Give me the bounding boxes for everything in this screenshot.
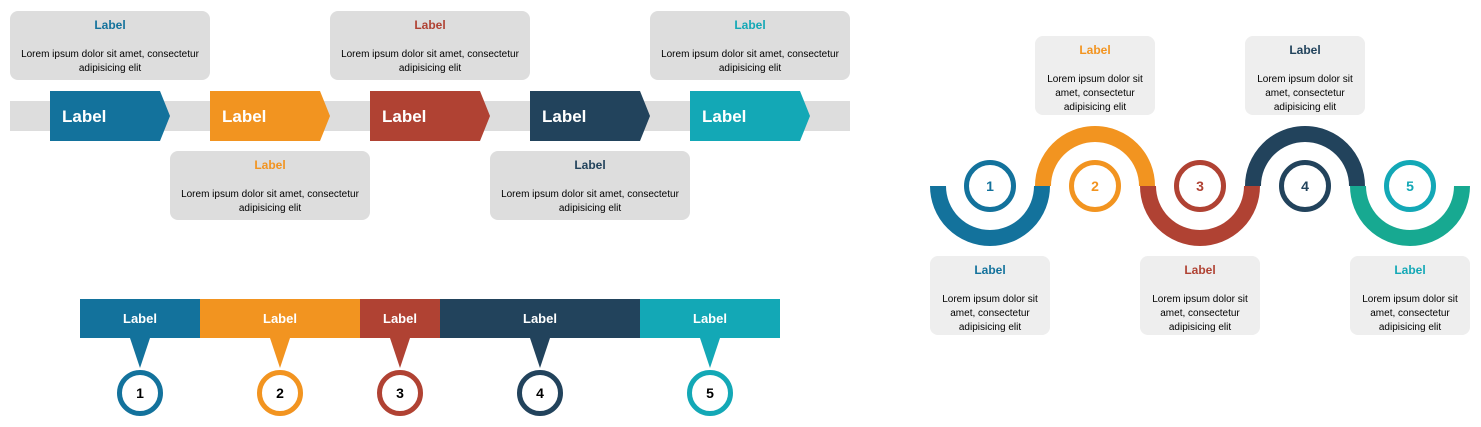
chevron 5: Label [702, 107, 746, 126]
wave callout 4 [1245, 36, 1365, 115]
step circle 1: 1 [986, 178, 994, 194]
wave callout 1: adipisicing elit [959, 322, 1021, 333]
step circle 2 [1072, 162, 1118, 210]
segment 5 [640, 299, 780, 414]
wave callout 5: Label [1394, 263, 1426, 277]
panel: wave timeline [930, 36, 1470, 335]
wave callout 3: adipisicing elit [1169, 322, 1231, 333]
callout 5: Lorem ipsum dolor sit amet, consectetur [661, 49, 840, 60]
segment 4: Label [523, 311, 557, 326]
wave callout 5: amet, consectetur [1370, 308, 1450, 319]
segment 4 [440, 299, 640, 414]
callout 1: Label [94, 18, 126, 32]
step circle 4: 4 [1301, 178, 1309, 194]
wave callout 1: amet, consectetur [950, 308, 1030, 319]
chevron 3: Label [382, 107, 426, 126]
segment 5: Label [693, 311, 727, 326]
step circle 3: 3 [1196, 178, 1204, 194]
step circle 5 [1386, 162, 1434, 210]
wave callout 5: Lorem ipsum dolor sit [1362, 294, 1458, 305]
chevron 3 [370, 91, 490, 141]
segment 1: 1 [136, 385, 144, 401]
wave callout 1: Lorem ipsum dolor sit [942, 294, 1038, 305]
callout 5 [650, 11, 850, 80]
step circle 1 [966, 162, 1014, 210]
callout 1 [10, 11, 210, 80]
chevron 2 [210, 91, 330, 141]
callout 4: Lorem ipsum dolor sit amet, consectetur [501, 189, 680, 200]
segment 4: 4 [536, 385, 544, 401]
wave callout 2: adipisicing elit [1064, 102, 1126, 113]
callout 5: Label [734, 18, 766, 32]
band [10, 101, 850, 131]
callout 3: Lorem ipsum dolor sit amet, consectetur [341, 49, 520, 60]
wave callout 1: Label [974, 263, 1006, 277]
chevron 4: Label [542, 107, 586, 126]
callout 3: Label [414, 18, 446, 32]
wave callout 2: Label [1079, 43, 1111, 57]
callout 3: adipisicing elit [399, 63, 461, 74]
segment 3: 3 [396, 385, 404, 401]
callout 4: adipisicing elit [559, 203, 621, 214]
wave callout 2 [1035, 36, 1155, 115]
wave arcs [938, 134, 1462, 238]
segment 2 [200, 299, 360, 414]
callout 4: Label [574, 158, 606, 172]
wave callout 4: Label [1289, 43, 1321, 57]
wave callout 3: Label [1184, 263, 1216, 277]
callout 1: Lorem ipsum dolor sit amet, consectetur [21, 49, 200, 60]
segment 1: Label [123, 311, 157, 326]
callout 3 [330, 11, 530, 80]
segment 3: Label [383, 311, 417, 326]
callout 2: Label [254, 158, 286, 172]
callout 1: adipisicing elit [79, 63, 141, 74]
callout 2: Lorem ipsum dolor sit amet, consectetur [181, 189, 360, 200]
wave callout 2: Lorem ipsum dolor sit [1047, 74, 1143, 85]
callout 5: adipisicing elit [719, 63, 781, 74]
callout 4 [490, 151, 690, 220]
callout 2: adipisicing elit [239, 203, 301, 214]
wave callout 4: Lorem ipsum dolor sit [1257, 74, 1353, 85]
wave callout 1 [930, 256, 1050, 335]
step circle 3 [1176, 162, 1224, 210]
wave callout 2: amet, consectetur [1055, 88, 1135, 99]
wave callout 3: Lorem ipsum dolor sit [1152, 294, 1248, 305]
chevron 5 [690, 91, 810, 141]
wave callout 5: adipisicing elit [1379, 322, 1441, 333]
segment 3 [360, 299, 440, 414]
segment 1 [80, 299, 200, 414]
segment 2: 2 [276, 385, 284, 401]
wave callout 3 [1140, 256, 1260, 335]
callout 2 [170, 151, 370, 220]
wave callout 3: amet, consectetur [1160, 308, 1240, 319]
step circle 2: 2 [1091, 178, 1099, 194]
panel: chevron timeline [10, 11, 850, 220]
chevron 2: Label [222, 107, 266, 126]
chevron 4 [530, 91, 650, 141]
wave callout 4: amet, consectetur [1265, 88, 1345, 99]
segment 2: Label [263, 311, 297, 326]
wave callout 5 [1350, 256, 1470, 335]
step circle 5: 5 [1406, 178, 1414, 194]
step circle 4 [1282, 162, 1328, 210]
wave callout 4: adipisicing elit [1274, 102, 1336, 113]
panel: segmented bar with pointers [80, 299, 780, 414]
segment 5: 5 [706, 385, 714, 401]
chevron 1 [50, 91, 170, 141]
chevron 1: Label [62, 107, 106, 126]
